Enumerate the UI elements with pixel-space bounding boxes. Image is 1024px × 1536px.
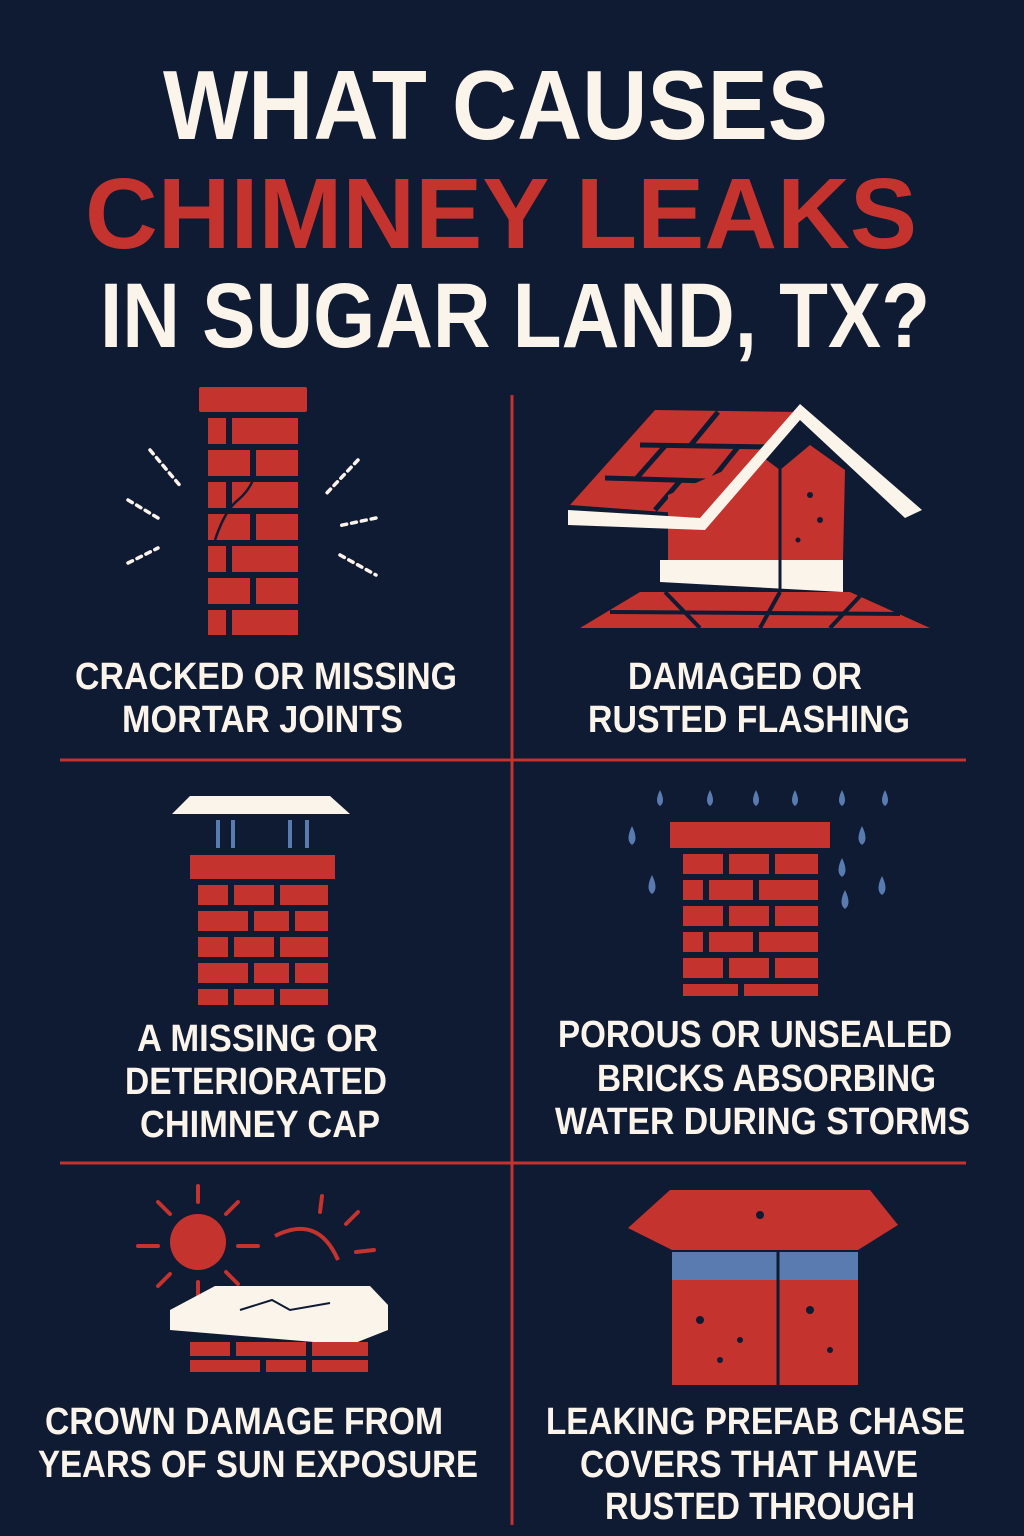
label: CROWN DAMAGE FROM — [45, 1401, 443, 1443]
label: LEAKING PREFAB CHASE — [546, 1401, 965, 1443]
label — [75, 656, 457, 741]
title — [85, 50, 930, 367]
icon: rain on chimney — [628, 790, 888, 996]
panel: flashing — [568, 404, 930, 741]
label: COVERS THAT HAVE — [580, 1444, 918, 1486]
icon: sun and crown — [138, 1186, 388, 1372]
label — [38, 1401, 478, 1486]
icon: roof flashing — [568, 404, 930, 628]
label: RUSTED THROUGH — [605, 1486, 915, 1528]
label: BRICKS ABSORBING — [597, 1058, 936, 1100]
label: RUSTED FLASHING — [588, 699, 910, 741]
icon: cracked chimney — [128, 387, 376, 635]
panel: crown damage — [38, 1186, 478, 1486]
panel: cracked mortar — [75, 387, 457, 741]
label: CHIMNEY CAP — [140, 1104, 380, 1146]
label: DAMAGED OR — [628, 656, 862, 698]
title: CHIMNEY LEAKS — [85, 158, 917, 270]
label: A MISSING OR — [137, 1018, 378, 1060]
label: POROUS OR UNSEALED — [558, 1014, 952, 1056]
label — [125, 1018, 387, 1146]
panel: chimney cap — [125, 796, 387, 1146]
panel: prefab chase covers — [546, 1190, 965, 1528]
label: YEARS OF SUN EXPOSURE — [38, 1444, 478, 1486]
title: WHAT CAUSES — [163, 50, 828, 160]
label — [588, 656, 910, 741]
icon: chase cover — [628, 1190, 898, 1385]
label: DETERIORATED — [125, 1061, 387, 1103]
label — [546, 1401, 965, 1528]
icon: chimney with cap — [172, 796, 350, 1005]
label: MORTAR JOINTS — [122, 699, 403, 741]
label: WATER DURING STORMS — [555, 1101, 970, 1143]
label: CRACKED OR MISSING — [75, 656, 457, 698]
label — [555, 1014, 970, 1143]
panel: porous bricks — [555, 790, 970, 1143]
